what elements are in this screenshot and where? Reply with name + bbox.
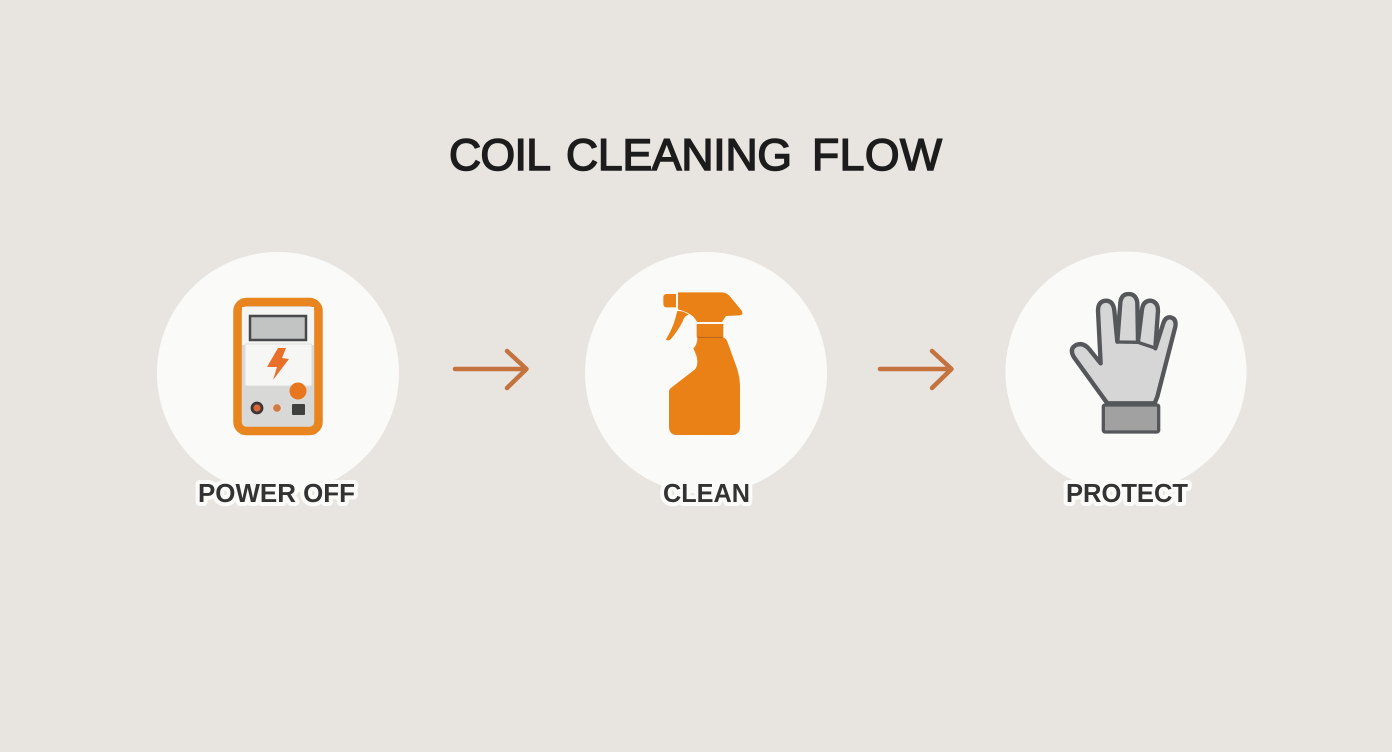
arrow: power off to clean <box>455 351 526 388</box>
label: clean: CLEAN <box>663 480 750 508</box>
label: protect: PROTECT <box>1066 480 1188 508</box>
step circle: power off <box>157 252 399 494</box>
title <box>449 131 942 180</box>
step circle: protect <box>1006 252 1246 492</box>
icon: glove <box>1072 294 1176 432</box>
icon: spray bottle <box>663 292 742 435</box>
label: power off: POWER OFF <box>198 480 355 508</box>
step 2: clean <box>585 252 827 508</box>
step 3: protect <box>1006 252 1246 508</box>
title: COIL <box>449 131 551 180</box>
icon: multimeter <box>238 302 318 431</box>
step circle: clean <box>585 252 827 494</box>
title: CLEANING <box>566 131 792 180</box>
step 1: power off <box>157 252 399 508</box>
arrow: clean to protect <box>880 351 952 388</box>
title: FLOW <box>812 131 942 180</box>
